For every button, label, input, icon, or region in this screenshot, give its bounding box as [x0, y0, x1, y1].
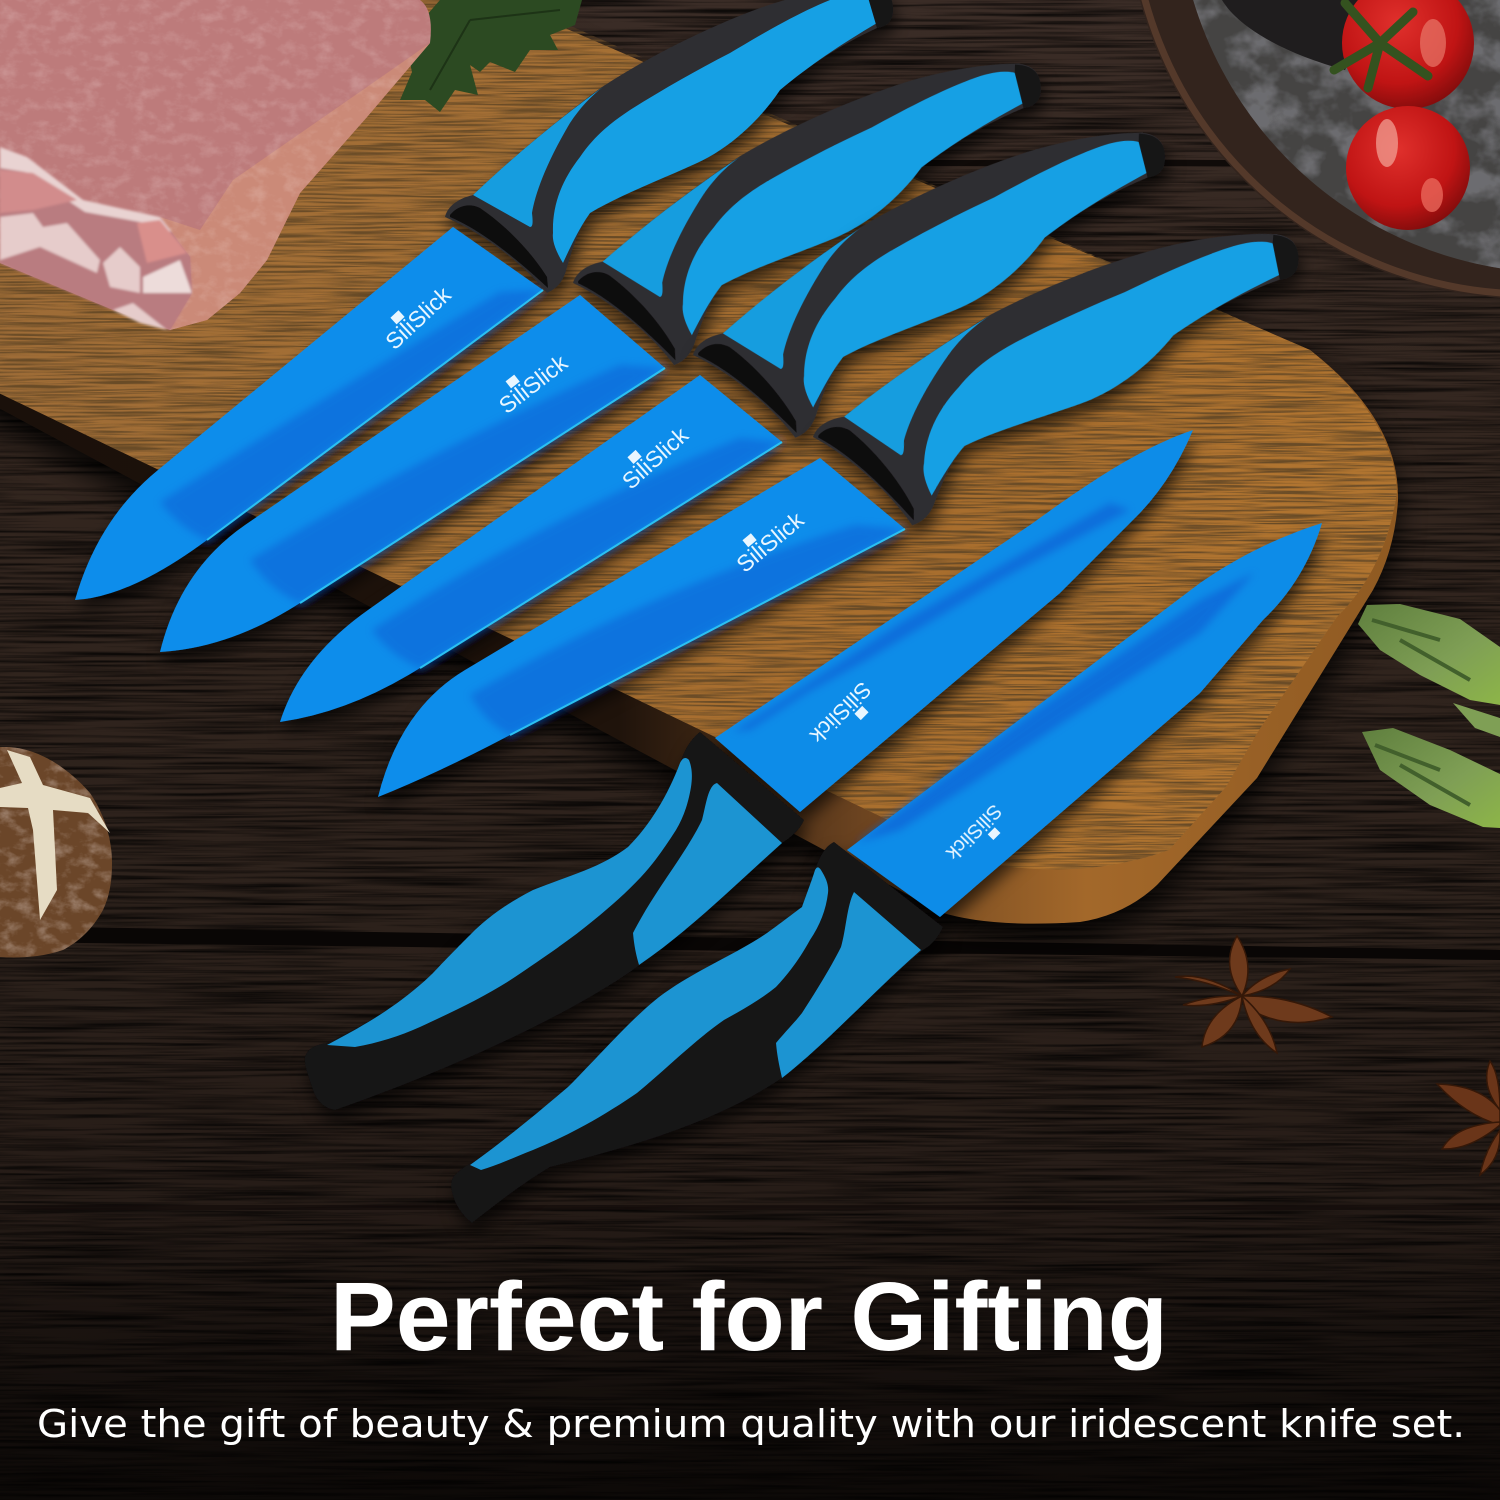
plate with tomatoes — [1126, 0, 1500, 299]
brand mark: blade 1: SiliSlick — [380, 281, 456, 355]
star anise small — [1437, 1061, 1500, 1175]
darkened lower area — [0, 1200, 1500, 1500]
handle 4 — [806, 195, 1301, 557]
raw meat — [0, 0, 431, 330]
star anise large — [1175, 936, 1332, 1053]
knife 5 — [305, 430, 1193, 1110]
handle 3 — [690, 115, 1166, 452]
icon: logo mark — [506, 375, 520, 388]
cutting board — [0, 0, 1500, 960]
title: Perfect for Gifting — [330, 1262, 1168, 1371]
handle 5 — [305, 732, 804, 1110]
brand mark: blade 2: SiliSlick — [494, 349, 573, 419]
knife 4 — [378, 195, 1301, 797]
brand mark: blade 6: SiliSlick — [941, 799, 1006, 864]
icon: logo mark — [627, 450, 642, 464]
icon: logo mark — [854, 706, 869, 720]
brand mark: blade 4: SiliSlick — [731, 506, 809, 577]
knife 3 — [280, 115, 1166, 722]
asparagus — [1358, 604, 1500, 828]
knife 2 — [160, 45, 1042, 652]
blade 4 — [378, 458, 905, 797]
knife 6 — [451, 523, 1322, 1223]
fat trim — [0, 147, 192, 330]
blade 3 — [280, 375, 782, 722]
knife 1 — [75, 0, 893, 600]
mushroom — [0, 747, 112, 957]
brand mark: blade 3: SiliSlick — [617, 421, 694, 494]
subtitle: Give the gift of beauty & premium quality with our iridescent knife set. — [37, 1402, 1465, 1446]
icon: tomato lower — [1346, 106, 1470, 230]
blade 1 — [75, 227, 543, 600]
brand mark: blade 5: SiliSlick — [804, 677, 876, 749]
blade 2 — [160, 295, 665, 652]
cilantro leaf — [400, 0, 582, 112]
blade 5 — [715, 430, 1193, 812]
blade 6 — [847, 523, 1322, 917]
icon: logo mark — [988, 827, 1000, 840]
handle 6 — [451, 842, 943, 1223]
icon: logo mark — [390, 310, 405, 324]
icon: tomato upper — [1334, 0, 1474, 109]
icon: logo mark — [742, 533, 757, 547]
handle 2 — [570, 45, 1042, 380]
handle 1 — [445, 0, 893, 293]
